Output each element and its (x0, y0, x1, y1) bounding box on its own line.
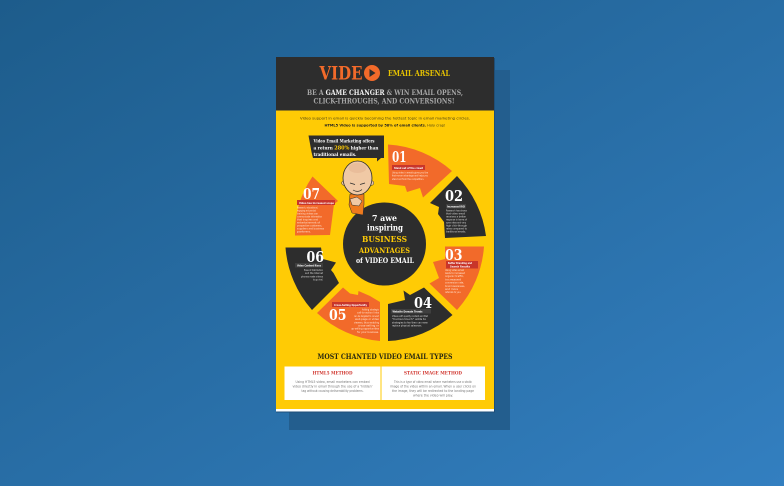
wedge 07: 07 (303, 185, 320, 203)
panel: static image method: STATIC IMAGE METHOD (404, 370, 462, 376)
wedge 03: conversion rate, (445, 281, 464, 285)
wedge 05: can be targeted to convert (354, 314, 380, 318)
wedge 07 (295, 176, 338, 236)
callout (308, 136, 384, 162)
wedge 05: Adding strategic (362, 308, 379, 312)
panel: HTML5 method: HTML5 METHOD (312, 370, 352, 376)
wedge 01: stand out from the competition. (392, 177, 424, 181)
wedge 05: 05 (329, 306, 346, 324)
wedge 07: partners. (297, 230, 311, 234)
intro text: Video support in email is quickly becoming the hottest topic in email marketing circles. (300, 116, 470, 120)
callout: a return 280% higher than (314, 146, 379, 152)
wedge 07: Video has Increased scope (299, 201, 334, 205)
headline (307, 88, 463, 106)
center circle (343, 202, 426, 286)
wedge 06: Ease of distribution (304, 268, 323, 272)
wedge 05: viewers, thus enabling (354, 320, 379, 324)
panel: HTML5 method (284, 366, 380, 400)
wedge 02: rates compared to (446, 226, 467, 230)
panel: static image method: image of the video within an email. When a user clicks on (390, 384, 476, 388)
panel: static image method (382, 366, 485, 400)
wedge 04: replace physical salesman. (392, 324, 422, 328)
panel: HTML5 method: video directly in email through the use of a 'hidden' (292, 384, 373, 388)
wedge 02: Increased ROI (447, 204, 465, 208)
center circle: BUSINESS (362, 235, 407, 245)
wedge 06 (286, 248, 339, 310)
wedge 05 (317, 288, 380, 341)
wedge 02: response in terms of (446, 218, 468, 222)
wedge 05: web page or video (355, 317, 379, 321)
wedge 03: increased (445, 277, 461, 281)
panel: HTML5 method: Using HTML5 video, email marketers can embed (296, 380, 370, 384)
monk mascot (342, 161, 374, 215)
intro text: HTML5 Video is supported by 58% of email clients. Holy crap! (324, 124, 446, 128)
wedge 06: 06 (306, 248, 324, 266)
wedge 03: organic traffic, (445, 274, 464, 278)
wedge 07: entertainment of (297, 220, 321, 224)
headline: CLICK-THROUGHS, AND CONVERSIONS! (314, 96, 454, 106)
wedge 05: for your business. (357, 330, 379, 334)
wedge 07: prospective customers, (297, 224, 322, 228)
center circle: 7 awe (372, 214, 398, 224)
callout: Video Email Marketing offers (313, 138, 375, 144)
panel: static image method: where the video will play. (413, 394, 453, 398)
wedge 03: referrals to you. (445, 290, 461, 294)
wedge 03: and more (445, 287, 458, 291)
center circle: of VIDEO EMAIL (356, 256, 414, 265)
logo: VIDEO: VIDE (319, 62, 362, 84)
wedge 03: leads to increased (445, 271, 465, 275)
wedge 03: brand awareness, (445, 284, 465, 288)
poster drop shadow (289, 70, 510, 430)
wedge 05: up-selling opportunities (351, 327, 379, 331)
wedge 04: Videos with quality content and that (392, 314, 429, 318)
wedge 06: and the Internet (305, 271, 324, 275)
headline: BE A GAME CHANGER & WIN EMAIL OPENS, (307, 88, 463, 97)
wedge 01: Stand out of the crowd (394, 166, 423, 170)
wedge 07: that inspires and (297, 218, 318, 222)
wedge 07: Research, educational, (297, 206, 318, 210)
wedge 01: first-mover advantage and helps you (392, 174, 428, 178)
wedge 03: 03 (445, 246, 462, 264)
wedge 01: 01 (392, 148, 406, 166)
wedge 05: call-to-action links (357, 311, 379, 315)
wedge 06: to go viral. (313, 278, 323, 282)
callout: traditional emails. (314, 152, 357, 158)
header band (276, 57, 494, 110)
wedge 02: open rates and very (446, 220, 466, 224)
panel: static image method: the image, they will be redirected to the landing page (392, 389, 474, 393)
wedge 06: Video Content Rises (297, 264, 321, 268)
center circle: inspiring (367, 224, 403, 234)
wedge 03: Search Results (450, 264, 470, 268)
panel: HTML5 method: tag without causing deliverability problems. (302, 389, 364, 393)
wedge 01 (388, 144, 452, 198)
poster edge shadow (276, 58, 495, 412)
wedge 02: Research has shown (446, 208, 467, 212)
wedge 02 (430, 176, 486, 238)
wedge 03: Using video email (445, 268, 464, 272)
center circle: ADVANTAGES (358, 246, 410, 255)
section heading: MOST CHANTED VIDEO EMAIL TYPES (318, 352, 452, 361)
wedge 02: traditional emails. (446, 230, 466, 234)
wedge 03: Better Branding and (448, 261, 472, 265)
wedge 02: high click-through (446, 224, 467, 228)
wedge 04: Website Domain Trends (392, 310, 423, 314)
wedge 07: suppliers and business (297, 226, 324, 230)
wedge 07: engaging and product (297, 208, 317, 212)
wedge 04: "human touch" adds to (392, 317, 426, 321)
logo: email arsenal: EMAIL ARSENAL (388, 68, 450, 78)
wedge 04: 04 (414, 294, 432, 312)
wedge 05: cross-selling or (358, 324, 380, 328)
wedge 01: Using video in emails gives you the (392, 170, 428, 174)
wedge 07: training videos can (297, 212, 318, 216)
wedge 02: 02 (445, 187, 463, 205)
wedge 07: communicate information (297, 214, 322, 218)
wedge 04: strategies to fan then can even (392, 320, 428, 324)
intro text (300, 116, 470, 128)
wedge 03 (430, 246, 484, 310)
wedge 02: receives a better (446, 214, 467, 218)
poster (276, 57, 494, 412)
wedge 06: phones make videos (301, 274, 323, 278)
wedge 04 (388, 288, 452, 341)
wedge 05: Cross-Selling Opportunity (334, 303, 367, 307)
wedge 02: that video email (446, 212, 465, 216)
panel: static image method: This is a type of video email where marketers use a static (393, 380, 472, 384)
